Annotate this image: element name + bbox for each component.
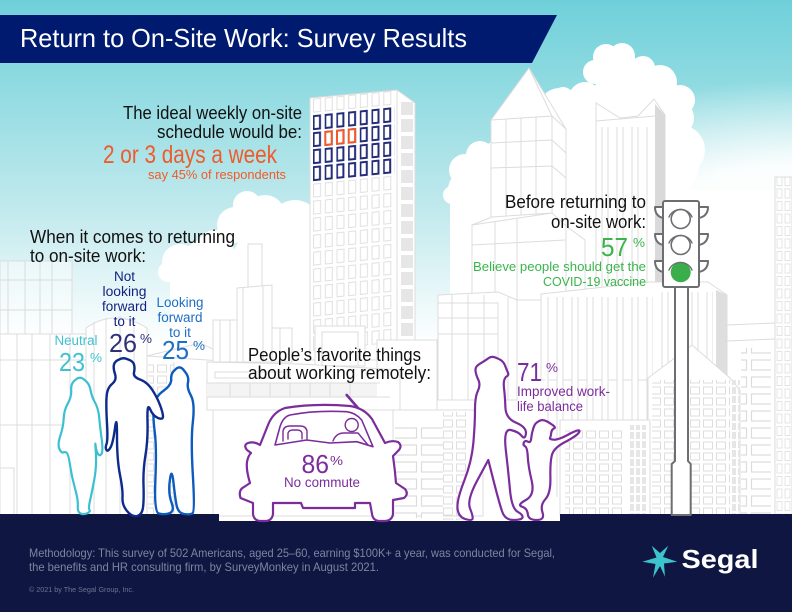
label: 71% work-life balance: life balance	[517, 398, 583, 414]
building: right block with horizontal windows	[727, 323, 775, 516]
building: antenna tower	[213, 244, 292, 362]
building: striped lower block	[541, 282, 727, 497]
building: far right tower	[775, 177, 792, 517]
label: 86% no commute: 86	[302, 449, 329, 479]
building: left grid block	[0, 261, 72, 336]
heading: returning to on-site work: When it comes to returning	[30, 227, 235, 247]
text: ideal schedule	[103, 103, 302, 182]
label: 86% no commute	[284, 449, 360, 490]
label: looking forward 25%: %	[193, 338, 205, 353]
label: 71% work-life balance: 71	[517, 357, 542, 387]
text: ideal schedule: say 45% of respondents	[148, 167, 286, 182]
text: before returning, vaccine 57%: Before returning to	[505, 192, 646, 212]
label: neutral 23%: %	[90, 350, 102, 365]
label: looking forward 25%: forward	[158, 310, 202, 325]
label: 71% work-life balance: %	[546, 360, 558, 375]
label: looking forward 25%	[156, 295, 205, 365]
figure: navy man not looking forward	[106, 358, 163, 516]
building: round tower	[86, 316, 147, 516]
clouds	[158, 43, 792, 350]
building: slanted roof block	[472, 213, 585, 300]
label: not looking forward 26%: Not	[114, 269, 135, 284]
text: before returning, vaccine 57%: 57	[601, 232, 628, 262]
icon: woman and child	[457, 357, 580, 520]
label: 86% no commute: No commute	[284, 474, 360, 490]
building: grid block in front of slanted roof	[438, 292, 517, 400]
figure: neutral woman	[59, 378, 102, 514]
heading: favorite things	[248, 345, 431, 383]
ground footer band	[0, 514, 792, 612]
text: before returning, vaccine 57%: COVID-19 vaccine	[543, 274, 646, 289]
text: before returning, vaccine 57%: on-site work:	[551, 212, 646, 232]
label: not looking forward 26%	[102, 269, 152, 358]
heading: returning to on-site work	[30, 227, 235, 266]
label: neutral 23%: Neutral	[54, 333, 98, 348]
label: 86% no commute: %	[330, 453, 343, 468]
label: looking forward 25%: 25	[162, 335, 189, 365]
building: pyramid roof with small windows	[648, 345, 740, 516]
text: ideal schedule: 2 or 3 days a week	[103, 141, 277, 169]
text: before returning, vaccine 57%: %	[633, 235, 645, 250]
building: central tall tower	[310, 90, 415, 360]
title banner: Return to On-Site Work: Survey Results	[20, 23, 467, 53]
text: ideal schedule: schedule would be:	[157, 122, 302, 142]
text: before returning, vaccine 57%	[473, 192, 646, 289]
building: pyramid roof tower	[491, 68, 566, 300]
heading: returning to on-site work: to on-site work:	[30, 246, 146, 266]
label: not looking forward 26%: looking	[102, 284, 146, 299]
text: ideal schedule: The ideal weekly on-site	[123, 103, 302, 123]
label: looking forward 25%: Looking	[156, 295, 204, 310]
methodology note: Methodology: This survey of 502 Americans, aged 25–60, earning $100K+ a year, was conducted for Segal,	[29, 546, 555, 560]
skyline: far buildings	[0, 68, 792, 520]
building: striped tower	[596, 99, 665, 340]
heading: favorite things: about working remotely:	[248, 363, 431, 383]
title banner	[0, 15, 557, 63]
heading: favorite things: People’s favorite things	[248, 345, 421, 365]
copyright: © 2021 by The Segal Group, Inc.	[29, 585, 134, 594]
icon: car no commute	[240, 395, 407, 521]
logo: Segal: Segal	[682, 544, 758, 574]
logo: Segal	[642, 544, 758, 578]
methodology note	[29, 546, 555, 574]
methodology note: the benefits and HR consulting firm, by SurveyMonkey in August 2021.	[29, 560, 379, 574]
label: not looking forward 26%: 26	[109, 328, 137, 358]
label: not looking forward 26%: forward	[102, 299, 147, 314]
label: not looking forward 26%: to it	[114, 314, 136, 329]
label: 71% work-life balance	[517, 357, 610, 414]
label: not looking forward 26%: %	[140, 331, 152, 346]
building: center low blocks	[207, 326, 650, 520]
building: left stepped block	[147, 343, 237, 516]
label: looking forward 25%: to it	[169, 325, 191, 340]
text: before returning, vaccine 57%: Believe people should get the	[473, 259, 646, 274]
icon: traffic light	[655, 201, 708, 515]
label: neutral 23%	[54, 333, 102, 377]
label: 71% work-life balance: Improved work-	[517, 383, 610, 399]
figure: blue man looking forward	[153, 367, 194, 514]
label: neutral 23%: 23	[59, 347, 85, 377]
building: lower left	[0, 334, 92, 516]
